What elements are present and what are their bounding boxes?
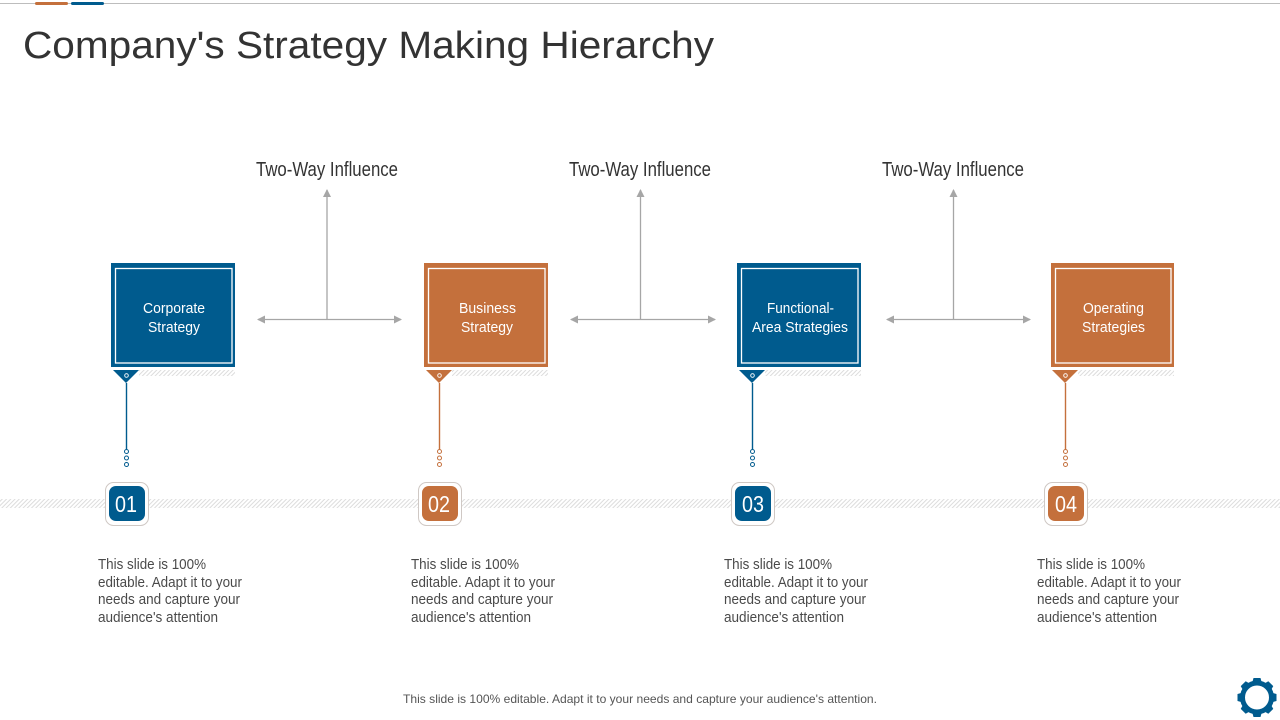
description 1: editable. Adapt it to your bbox=[98, 574, 242, 591]
description 3: audience's attention bbox=[724, 609, 844, 626]
box: functional-area strategies bbox=[737, 263, 861, 367]
box: corporate strategy: Strategy bbox=[148, 319, 200, 336]
label: two-way influence 3: Two-Way Influence bbox=[882, 159, 1024, 181]
description 4: audience's attention bbox=[1037, 609, 1157, 626]
arrow: vertical 1 bbox=[326, 190, 328, 320]
number badge 01 bbox=[106, 482, 148, 526]
description 2: audience's attention bbox=[411, 609, 531, 626]
panel: operating strategies bbox=[1037, 263, 1185, 626]
panel: corporate strategy bbox=[98, 263, 246, 626]
box: functional-area strategies: Area Strategies bbox=[752, 319, 848, 336]
description 4: editable. Adapt it to your bbox=[1037, 574, 1181, 591]
description 1: audience's attention bbox=[98, 609, 218, 626]
description 2: needs and capture your bbox=[411, 591, 553, 608]
description 3: This slide is 100% bbox=[724, 556, 832, 573]
box: business strategy: Business bbox=[459, 300, 516, 317]
number badge 03: 03 bbox=[742, 491, 764, 517]
connector bbox=[113, 370, 235, 466]
top rule with accent tabs bbox=[0, 2, 1280, 5]
box: business strategy: Strategy bbox=[461, 319, 513, 336]
connector bbox=[739, 370, 861, 466]
number badge 02: 02 bbox=[428, 491, 450, 517]
box: business strategy bbox=[424, 263, 548, 367]
icon: gear bbox=[1238, 678, 1276, 717]
number badge 04: 04 bbox=[1055, 491, 1077, 517]
box: operating strategies bbox=[1051, 263, 1174, 367]
number badge 04 bbox=[1044, 482, 1088, 526]
number badge 03 bbox=[732, 482, 774, 526]
description 1: needs and capture your bbox=[98, 591, 240, 608]
box: functional-area strategies: Functional- bbox=[767, 300, 834, 317]
arrow: vertical 3 bbox=[952, 190, 954, 320]
title: Company's Strategy Making Hierarchy bbox=[23, 25, 714, 67]
footer note: This slide is 100% editable. Adapt it to your needs and capture your audience's attention. bbox=[403, 692, 877, 706]
hatched timeline band bbox=[0, 499, 1280, 508]
panel: functional-area strategies bbox=[724, 263, 872, 626]
number badge 02 bbox=[418, 482, 462, 526]
label: two-way influence 2: Two-Way Influence bbox=[569, 159, 711, 181]
description 1: This slide is 100% bbox=[98, 556, 206, 573]
box: operating strategies: Operating bbox=[1083, 300, 1144, 317]
connector bbox=[426, 370, 548, 466]
panel: business strategy bbox=[411, 263, 559, 626]
arrow: horizontal 2 bbox=[571, 318, 715, 320]
arrow: horizontal 3 bbox=[887, 318, 1030, 320]
description 4: needs and capture your bbox=[1037, 591, 1179, 608]
connector bbox=[1052, 370, 1174, 466]
number badge 01: 01 bbox=[115, 491, 137, 517]
box: corporate strategy: Corporate bbox=[143, 300, 205, 317]
box: corporate strategy bbox=[111, 263, 235, 367]
description 4: This slide is 100% bbox=[1037, 556, 1145, 573]
description 3: editable. Adapt it to your bbox=[724, 574, 868, 591]
description 2: editable. Adapt it to your bbox=[411, 574, 555, 591]
box: operating strategies: Strategies bbox=[1082, 319, 1145, 336]
label: two-way influence 1: Two-Way Influence bbox=[256, 159, 398, 181]
arrow: horizontal 1 bbox=[258, 318, 401, 320]
description 2: This slide is 100% bbox=[411, 556, 519, 573]
arrow: vertical 2 bbox=[640, 190, 642, 320]
description 3: needs and capture your bbox=[724, 591, 866, 608]
